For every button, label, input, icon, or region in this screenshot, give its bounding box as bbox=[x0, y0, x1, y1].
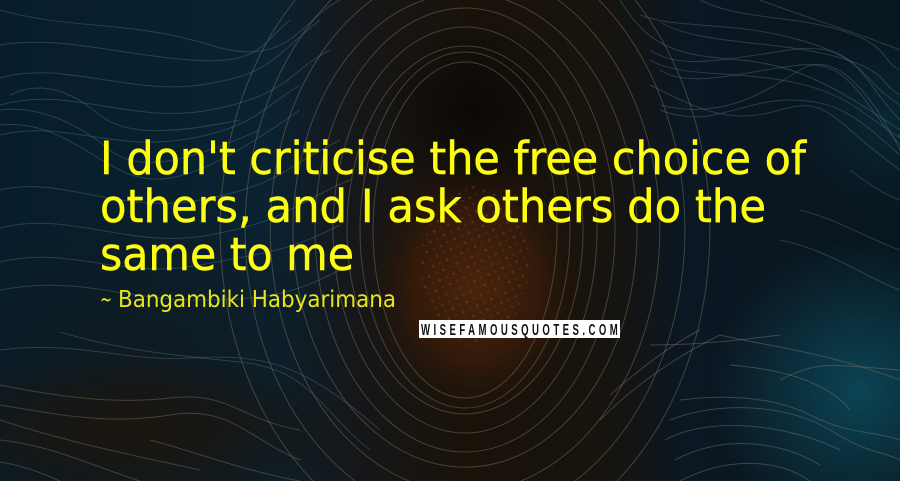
background: contour lines around oval bbox=[220, 0, 710, 481]
quote line 3: same to me bbox=[100, 228, 354, 281]
background: lower-left warm wave lines bbox=[0, 385, 300, 481]
quote line 2: others, and I ask others do the bbox=[100, 180, 766, 233]
watermark badge: WISEFAMOUSQUOTES.COM bbox=[421, 320, 618, 339]
background: left wave lines bbox=[0, 0, 380, 450]
background: right wave lines bbox=[620, 0, 900, 290]
tilde: ~ bbox=[100, 287, 112, 313]
quote text bbox=[100, 132, 807, 281]
author attribution bbox=[100, 287, 396, 313]
quote line 1: I don't criticise the free choice of bbox=[100, 132, 807, 185]
background: lower-right wave lines bbox=[600, 330, 900, 481]
author name: Bangambiki Habyarimana bbox=[118, 287, 396, 313]
